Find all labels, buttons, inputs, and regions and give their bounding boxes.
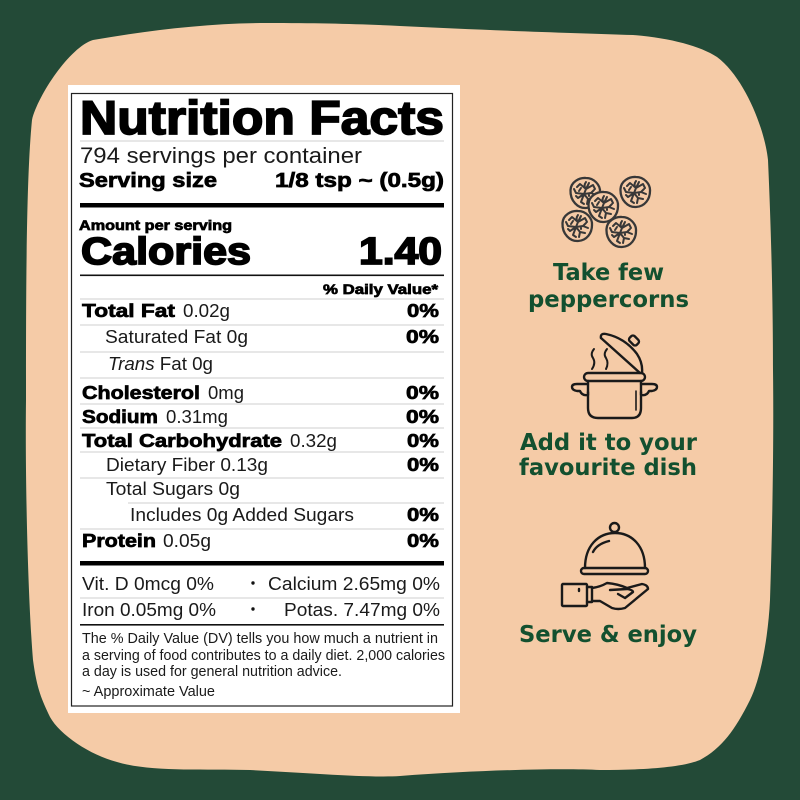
row: total carbohydrate — [82, 430, 439, 451]
icon: serving cloche and hand — [562, 523, 648, 609]
daily value header: % Daily Value* — [323, 281, 439, 297]
icon: peppercorns — [562, 177, 650, 247]
row: dietary fiber — [106, 454, 439, 475]
row: protein — [82, 530, 439, 551]
row: total fat: 0% — [407, 300, 439, 321]
row: cholesterol: Cholesterol — [82, 382, 200, 403]
panel: nutrition facts label — [68, 85, 460, 713]
row: dietary fiber: 0% — [407, 454, 439, 475]
label: add it to your favourite dish — [519, 430, 698, 481]
heading: Nutrition Facts: Nutrition Facts — [80, 91, 444, 144]
amount per serving: Amount per serving — [79, 218, 232, 233]
row: saturated fat — [105, 326, 439, 347]
footnote text: a serving of food contributes to a daily diet. 2,000 calories — [82, 648, 445, 664]
serving size row — [79, 170, 444, 192]
row: total carbohydrate: 0% — [407, 430, 439, 451]
row: added sugars: Includes 0g Added Sugars — [130, 504, 354, 525]
icon: cooking pot — [572, 334, 657, 418]
row: protein: 0.05g — [163, 530, 211, 551]
row: total sugars: Total Sugars 0g — [106, 478, 240, 499]
label: add it to your favourite dish: Add it to your — [520, 430, 698, 456]
row: iron and potassium — [82, 599, 440, 620]
row: total carbohydrate: Total Carbohydrate — [82, 430, 282, 451]
row: vitamin D and calcium: Vit. D 0mcg 0% — [82, 573, 214, 594]
step 2: add it to your dish — [519, 334, 698, 481]
label: take few peppercorns: Take few — [553, 260, 664, 286]
row: protein: Protein — [82, 530, 156, 551]
serving size row: 1/8 tsp ~ (0.5g) — [275, 170, 444, 192]
calories row: Calories — [81, 231, 251, 273]
row: sodium — [82, 406, 439, 427]
row: total fat: Total Fat — [82, 300, 175, 321]
label: take few peppercorns — [528, 260, 689, 313]
row: sodium: 0% — [406, 406, 439, 427]
row: cholesterol: 0% — [406, 382, 439, 403]
row: trans fat: Trans Fat 0g — [108, 353, 213, 374]
row: saturated fat: Saturated Fat 0g — [105, 326, 248, 347]
step 1: take few peppercorns — [528, 177, 689, 313]
row: added sugars — [130, 504, 439, 525]
row: protein: 0% — [407, 530, 439, 551]
calories row — [81, 231, 442, 273]
label: add it to your favourite dish: favourite dish — [519, 455, 697, 481]
footnote text: a day is used for general nutrition advice. — [82, 664, 342, 680]
row: cholesterol: 0mg — [208, 382, 244, 403]
footnote text: ~ Approximate Value — [82, 684, 215, 700]
step 3: serve and enjoy — [519, 523, 697, 648]
row: cholesterol — [82, 382, 439, 403]
footnote text — [82, 631, 445, 700]
footnote text: The % Daily Value (DV) tells you how much a nutrient in — [82, 631, 438, 647]
row: vitamin D and calcium: Calcium 2.65mg 0% — [268, 573, 440, 594]
row: vitamin D and calcium — [82, 573, 440, 594]
row: saturated fat: 0% — [406, 326, 439, 347]
calories row: 1.40 — [359, 231, 442, 273]
row: total fat — [82, 300, 439, 321]
row: total fat: 0.02g — [183, 300, 230, 321]
servings per container: 794 servings per container — [80, 143, 362, 168]
label: serve and enjoy: Serve & enjoy — [519, 622, 697, 648]
serving size row: Serving size — [79, 170, 217, 192]
row: iron and potassium: Iron 0.05mg 0% — [82, 599, 216, 620]
row: added sugars: 0% — [407, 504, 439, 525]
label: take few peppercorns: peppercorns — [528, 287, 689, 313]
row: dietary fiber: Dietary Fiber 0.13g — [106, 454, 268, 475]
row: sodium: Sodium — [82, 406, 158, 427]
row: total carbohydrate: 0.32g — [290, 430, 337, 451]
row: sodium: 0.31mg — [166, 406, 228, 427]
row: iron and potassium: Potas. 7.47mg 0% — [284, 599, 440, 620]
